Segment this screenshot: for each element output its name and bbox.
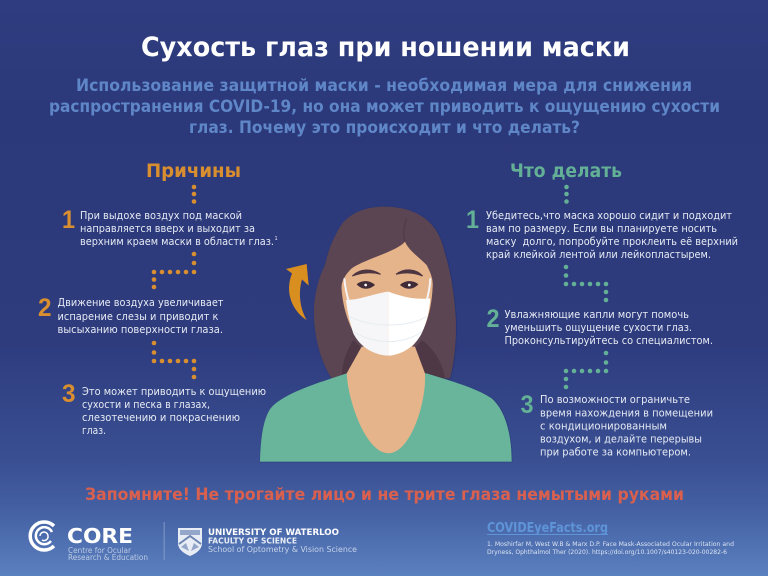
action 3: с кондиционированным xyxy=(540,420,667,432)
eyes xyxy=(357,281,418,289)
action 1: край клейкой лентой или лейкопластырем. xyxy=(486,249,711,261)
action 2: 2 xyxy=(486,305,500,333)
cause 2 xyxy=(38,294,224,336)
website link: COVIDEyeFacts.org xyxy=(487,521,608,536)
icon: airflow arrow xyxy=(286,264,309,320)
cause 1 xyxy=(62,206,278,248)
logo: CORE: CORE xyxy=(67,524,133,548)
action 3: По возможности ограничьте xyxy=(540,394,690,406)
cause 3: Это может приводить к ощущению xyxy=(82,386,266,398)
action 3 xyxy=(520,391,713,458)
dotted connector: heading to action 1 xyxy=(564,185,569,204)
action 3: при работе за компьютером. xyxy=(540,446,691,458)
dotted connector: heading to cause 1 xyxy=(192,185,196,204)
hair parting xyxy=(404,218,407,242)
dotted connector: action 2 to action 3 xyxy=(564,351,608,389)
cause 3: 3 xyxy=(62,380,76,408)
illustration: woman wearing a mask xyxy=(260,207,512,462)
cause 2: высыханию поверхности глаза. xyxy=(58,324,223,336)
action 2: Увлажняющие капли могут помочь xyxy=(504,309,689,321)
reference: 1. Moshirfar M, West W.B & Marx D.P. Face Mask-Associated Ocular Irritation and xyxy=(487,540,734,548)
icon: university shield xyxy=(178,528,202,556)
cause 1: направляется вверх и выходит за xyxy=(80,223,255,235)
action 1: Убедитесь,что маска хорошо сидит и подходит xyxy=(486,210,732,222)
intro text: Использование защитной маски - необходимая мера для снижения xyxy=(76,76,692,96)
logo: University of Waterloo: FACULTY OF SCIENCE xyxy=(208,536,297,546)
action 2: уменьшить ощущение сухости глаз. xyxy=(504,322,692,334)
intro text: глаз. Почему это происходит и что делать? xyxy=(189,118,580,138)
eyebrows xyxy=(352,270,423,276)
cause 3: слезотечению и покраснению xyxy=(82,412,240,424)
action 3: воздухом, и делайте перерывы xyxy=(540,434,702,446)
action 1 xyxy=(466,206,738,261)
cause 3: глаз. xyxy=(82,425,106,437)
cause 1: 1 xyxy=(274,236,278,242)
shirt xyxy=(260,373,512,462)
neck and chest xyxy=(347,347,425,453)
icon: CORE eye swirl xyxy=(30,522,54,550)
action 3: время нахождения в помещении xyxy=(540,408,713,420)
hair xyxy=(314,207,456,378)
action 1: 1 xyxy=(466,206,479,234)
dotted connector: cause 2 to cause 3 xyxy=(152,341,196,379)
cause 2: 2 xyxy=(38,294,52,322)
face xyxy=(342,242,433,352)
surgical mask xyxy=(346,292,430,356)
cause 1: верхним краем маски в области глаз. xyxy=(80,236,274,248)
logo: University of Waterloo: School of Optometry & Vision Science xyxy=(208,545,357,554)
dotted connector: action 1 to action 2 xyxy=(564,265,608,302)
cause 2: Движение воздуха увеличивает xyxy=(58,297,224,309)
title: Сухость глаз при ношении маски xyxy=(141,32,630,63)
logo: CORE xyxy=(30,522,148,562)
heading: what to do: Что делать xyxy=(510,160,622,182)
cause 3 xyxy=(62,380,266,437)
panel: actions steps xyxy=(466,185,738,458)
action 2 xyxy=(486,305,713,347)
cause 1: 1 xyxy=(62,206,75,234)
action 3: 3 xyxy=(520,391,534,419)
heading: causes: Причины xyxy=(146,160,241,182)
mask ear loops xyxy=(344,278,430,303)
cause 3: сухости и песка в глазах, xyxy=(82,399,210,411)
action 1: маску долго, попробуйте проклеить её верхний xyxy=(486,236,738,248)
reference: Dryness, Ophthalmol Ther (2020). https://doi.org/10.1007/s40123-020-00282-6 xyxy=(487,548,727,556)
reminder: Запомните! Не трогайте лицо и не трите глаза немытыми руками xyxy=(85,485,684,504)
action 1: вам по размеру. Если вы планируете носить xyxy=(486,223,717,235)
action 2: Проконсультируйтесь со специалистом. xyxy=(504,335,713,347)
dotted connector: cause 1 to cause 2 xyxy=(152,252,196,289)
cause 2: испарение слезы и приводит к xyxy=(58,311,218,323)
logo: University of Waterloo xyxy=(178,528,357,556)
logo: CORE: Centre for Ocular xyxy=(68,546,132,555)
panel: causes steps xyxy=(38,185,278,437)
logo: CORE: Research & Education xyxy=(68,553,148,562)
divider xyxy=(163,522,166,560)
hair shade behind neck xyxy=(342,340,445,378)
intro text xyxy=(49,76,720,138)
reference xyxy=(487,540,734,556)
logo: University of Waterloo: UNIVERSITY OF WATERLOO xyxy=(208,528,339,538)
cause 1: При выдохе воздух под маской xyxy=(80,210,242,222)
